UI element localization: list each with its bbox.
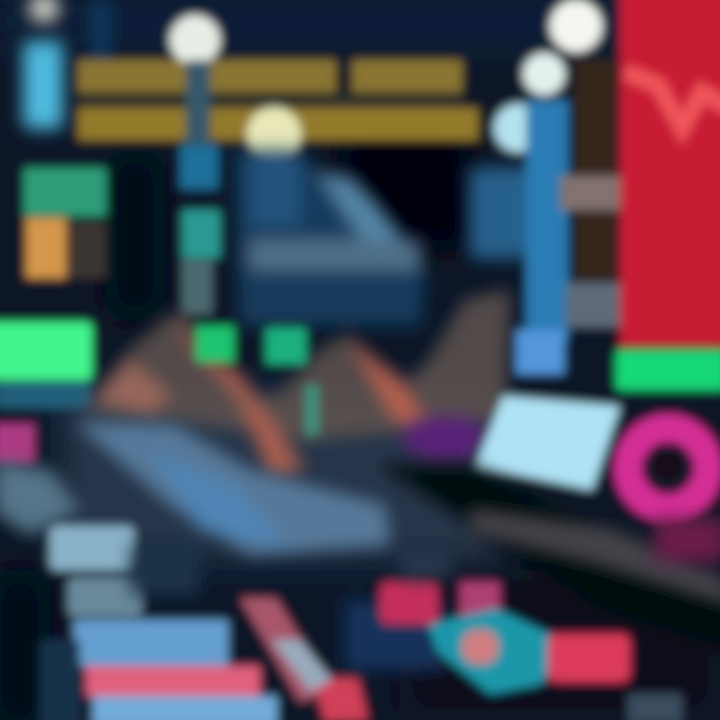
blue diagonal ribbon (75, 422, 390, 555)
left stacked bar chart (24, 168, 106, 278)
dark diagonal band with brown bar (380, 465, 720, 650)
green chart markers (196, 326, 319, 435)
right brown bars (560, 60, 636, 327)
right diagonal markers and blue bars (470, 0, 602, 374)
title (78, 60, 478, 140)
left pink tag (0, 424, 34, 462)
red panel trend line (625, 72, 720, 128)
bottom right colored blocks (345, 550, 682, 720)
light blue card (476, 396, 620, 490)
green bar under red panel (616, 350, 720, 390)
green highlighted bar (0, 322, 92, 408)
pink donut chart (628, 428, 708, 508)
red panel (620, 0, 720, 346)
central blue mountain shape (235, 150, 425, 325)
central vertical marker line (170, 15, 301, 314)
wavy area chart (85, 290, 510, 475)
purple accent (403, 416, 487, 460)
bottom diagonal stripes (240, 598, 368, 720)
bottom left striped table (40, 620, 277, 720)
left column: top marker and cyan bar (24, 0, 110, 128)
left stacked pills (0, 460, 200, 616)
